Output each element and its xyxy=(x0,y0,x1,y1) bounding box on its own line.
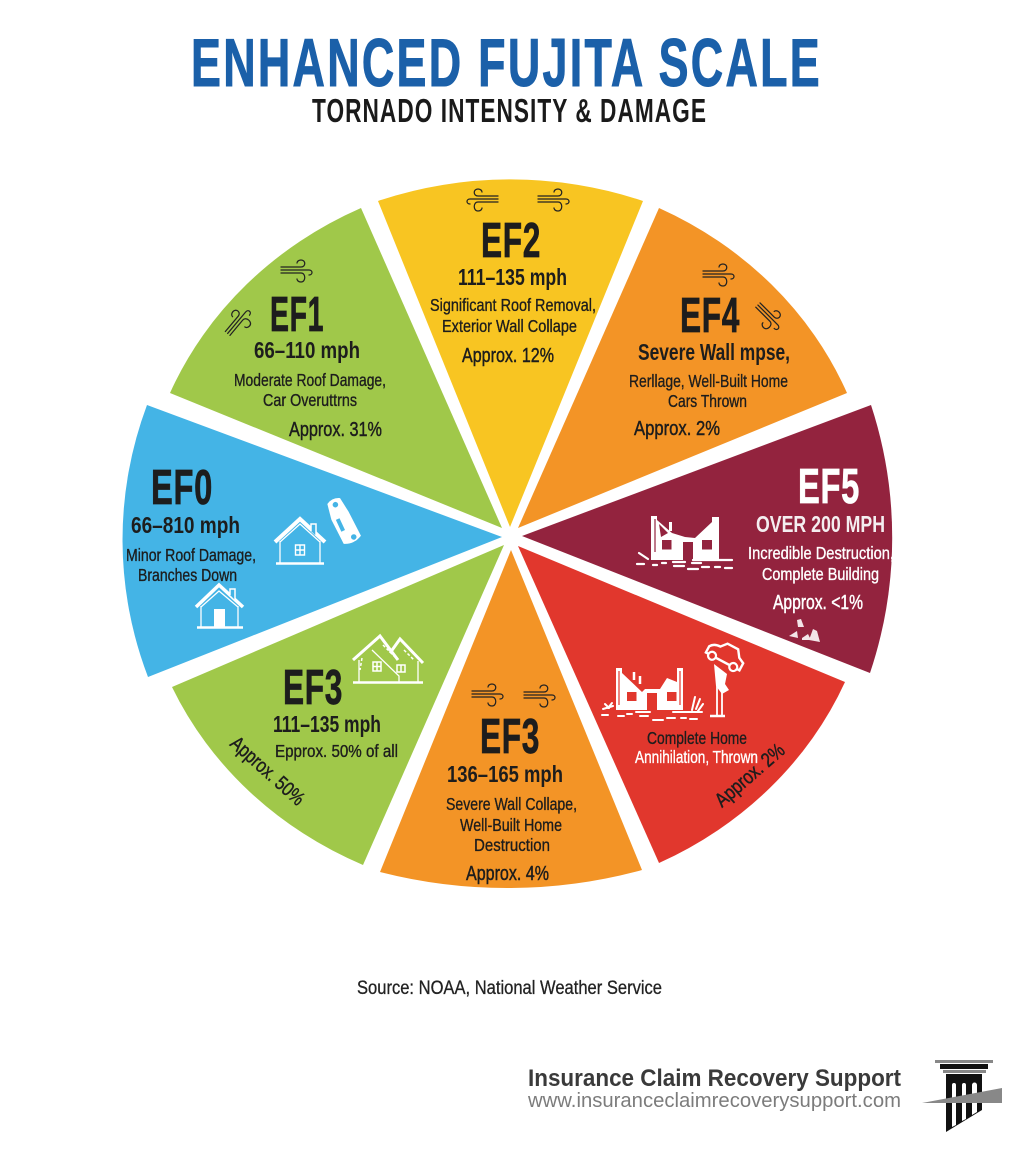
footer: company name: Insurance Claim Recovery Support xyxy=(528,1065,901,1092)
description line 2: EF5: Complete Building xyxy=(762,564,879,584)
icon: destroyed home xyxy=(602,668,703,720)
wedge: EF4 orange xyxy=(518,208,847,528)
icon: wind left xyxy=(467,189,498,211)
description: EF2: Significant Roof Removal, xyxy=(430,295,596,315)
description line 2: EF4: Cars Thrown xyxy=(668,391,747,411)
icon: damaged houses xyxy=(353,636,423,682)
share: EF1: Approx. 31% xyxy=(289,419,382,441)
icon: wind right xyxy=(538,189,569,211)
icon: overturned car xyxy=(324,495,362,547)
panel: red category xyxy=(518,546,845,863)
icon: wind horizontal xyxy=(703,264,734,286)
label: EF0: EF0 xyxy=(151,461,213,515)
wedge: EF1 green xyxy=(170,208,502,528)
share: EF4: Approx. 2% xyxy=(634,418,720,440)
footer: website: www.insuranceclaimrecoverysupport.com xyxy=(527,1090,901,1112)
wind speed: EF3: 111–135 mph xyxy=(273,711,381,737)
wedge: EF5 maroon xyxy=(522,405,892,673)
share: EF3 rotated: Approx. 50% xyxy=(226,732,309,810)
description: red: Complete Home xyxy=(647,728,747,748)
share: EF3: Approx. 4% xyxy=(466,863,549,885)
panel: EF3 orange xyxy=(380,550,642,888)
description line 2: EF1: Car Overuttrns xyxy=(263,390,357,410)
description: EF5: Incredible Destruction, xyxy=(748,543,894,563)
icon: wind horizontal xyxy=(281,260,312,282)
label: EF5: EF5 xyxy=(798,460,860,514)
wind speed: EF2: 111–135 mph xyxy=(458,264,567,290)
description: EF3: Severe Wall Collape, xyxy=(446,794,577,814)
subtitle: TORNADO INTENSITY & DAMAGE xyxy=(312,92,707,129)
icon: wind left xyxy=(472,684,503,706)
share: red rotated: Approx. 2% xyxy=(711,739,790,812)
description line 3: EF3: Destruction xyxy=(474,835,550,855)
wedge: EF2 yellow xyxy=(378,179,643,527)
wind speed: EF3: 136–165 mph xyxy=(447,761,563,787)
icon: car on pole xyxy=(704,637,748,716)
label: EF3: EF3 xyxy=(480,710,540,764)
wedge: EF3 orange xyxy=(380,550,642,888)
wind speed: EF5: OVER 200 MPH xyxy=(756,511,885,537)
wedge: EF3 green xyxy=(172,545,504,865)
share: EF2: Approx. 12% xyxy=(462,345,554,367)
description: EF4: Rerllage, Well-Built Home xyxy=(629,371,788,391)
panel: EF2 xyxy=(378,179,643,527)
description line 2: EF2: Exterior Wall Collape xyxy=(442,316,577,336)
description: EF3: Epprox. 50% of all xyxy=(275,741,398,761)
panel: EF4 xyxy=(518,208,847,528)
description line 2: red: Annihilation, Thrown xyxy=(635,747,758,767)
icon: destroyed building xyxy=(637,516,732,569)
description: EF1: Moderate Roof Damage, xyxy=(234,370,386,390)
panel: EF5 xyxy=(522,405,894,673)
wind speed: EF1: 66–110 mph xyxy=(254,337,360,363)
description line 2: EF0: Branches Down xyxy=(138,565,237,585)
icon: wind diagonal xyxy=(749,298,787,335)
panel: EF0 xyxy=(123,405,502,677)
wind speed: EF0: 66–810 mph xyxy=(131,512,240,538)
icon: house with window xyxy=(275,519,325,564)
description: EF0: Minor Roof Damage, xyxy=(126,545,256,565)
share: EF5: Approx. <1% xyxy=(773,592,863,614)
wedge: red xyxy=(518,546,845,863)
icon: wind right xyxy=(524,685,555,707)
icon: logo column xyxy=(922,1060,1002,1132)
heading: EF4: Severe Wall mpse, xyxy=(638,339,790,365)
source note: Source: NOAA, National Weather Service xyxy=(357,978,662,999)
panel: EF1 xyxy=(170,208,502,528)
icon: house with door xyxy=(196,585,243,628)
label: EF1: EF1 xyxy=(270,288,324,342)
icon: debris xyxy=(789,619,820,642)
icon: wind diagonal xyxy=(220,303,257,341)
label: EF3: EF3 xyxy=(283,661,343,715)
label: EF2: EF2 xyxy=(481,214,541,268)
wedge: EF0 blue xyxy=(123,405,502,677)
description line 2: EF3: Well-Built Home xyxy=(460,815,562,835)
panel: EF3 green xyxy=(172,545,504,865)
label: EF4: EF4 xyxy=(680,289,740,343)
